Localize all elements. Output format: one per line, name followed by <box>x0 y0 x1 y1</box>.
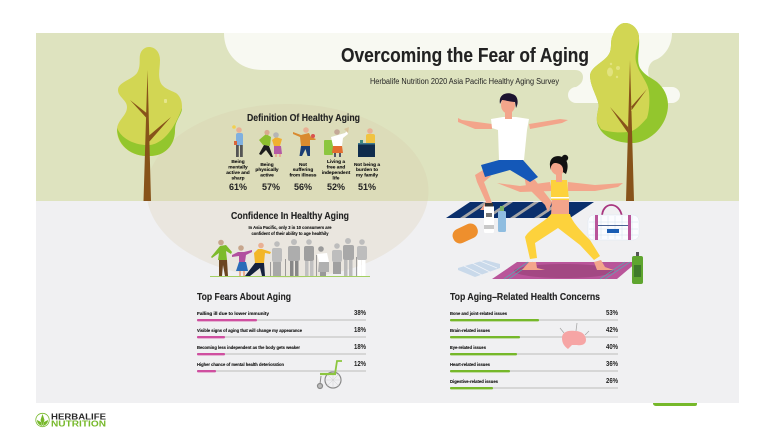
fear row 1: Falling ill due to lower immunity <box>197 311 269 317</box>
icon: wheelchair <box>318 361 342 388</box>
label: independent life: independent <box>322 170 351 176</box>
concern row 4 <box>450 361 619 372</box>
confidence text: In Asia Pacific, only 3 in 10 consumers are <box>248 225 332 231</box>
icon: independent traveller <box>324 127 349 157</box>
concern row 5: 26% <box>606 378 619 385</box>
panel: confidence in healthy aging <box>210 210 370 277</box>
label: mentally active: Being <box>231 159 245 165</box>
label: independent life: free and <box>327 164 345 170</box>
icon: mentally active person <box>232 125 243 157</box>
label: mentally active: active and <box>226 170 250 176</box>
fear row 2: Visible signs of aging that will change my appearance <box>197 328 302 334</box>
fear row 1: 38% <box>354 310 367 317</box>
percentages: 56% <box>294 182 312 192</box>
right tree <box>590 23 668 201</box>
green tab at bottom right <box>653 403 697 406</box>
icon: green bottle <box>632 252 643 284</box>
label: physically active: Being <box>260 162 274 168</box>
title: Overcoming the Fear of Aging <box>341 45 589 67</box>
blue striped yoga mat <box>446 202 594 218</box>
icon: folded towel <box>458 260 500 277</box>
concern row 4: 36% <box>606 361 619 368</box>
icon: white water bottle <box>484 203 494 233</box>
logo text: Herbalife: HERBALIFE <box>51 412 106 422</box>
label: not a burden: my family <box>356 172 378 178</box>
icon: brain <box>560 323 589 349</box>
heading: fears: Top Fears About Aging <box>197 291 291 303</box>
concern row 2: 42% <box>606 327 619 334</box>
icon: person free from illness <box>293 127 316 156</box>
fear row 3: 18% <box>354 344 367 351</box>
label: not a burden: burden to <box>356 167 378 173</box>
fear row 1 <box>197 310 367 321</box>
logo: Herbalife Nutrition <box>36 412 106 429</box>
icon: clear water bottle <box>498 206 506 232</box>
fear row 2: 18% <box>354 327 367 334</box>
heading: confidence: Confidence In Healthy Aging <box>231 210 349 222</box>
fear row 4: 12% <box>354 361 367 368</box>
concern row 5: Digestive-related issues <box>450 379 498 385</box>
concern row 1 <box>450 310 619 321</box>
icon: rolled orange towel <box>450 221 480 246</box>
background panel <box>36 33 739 403</box>
grey figures <box>270 238 367 276</box>
percentages: 57% <box>262 182 280 192</box>
panel: top aging-related health concerns <box>450 291 619 389</box>
label: physically active: physically <box>255 167 279 173</box>
pink yoga mat <box>492 262 637 279</box>
logo text: Nutrition: NUTRITION <box>51 420 106 429</box>
man in yoga pose <box>458 93 568 212</box>
concern row 5 <box>450 378 619 389</box>
concern row 3 <box>450 344 619 355</box>
percentages: 52% <box>327 182 345 192</box>
fear row 2 <box>197 327 367 338</box>
concern row 3: 40% <box>606 344 619 351</box>
fear row 4: Higher chance of mental health deterioration <box>197 362 284 368</box>
fear row 3: Becoming less independent as the body gets weaker <box>197 345 300 351</box>
woman in yoga pose <box>497 155 623 270</box>
heading: definition: Definition Of Healthy Aging <box>247 113 360 124</box>
percentages: 61% <box>229 182 247 192</box>
fear row 4 <box>197 361 367 372</box>
label: not suffering: Not <box>299 162 307 168</box>
icon: person at kitchen counter <box>358 128 375 157</box>
panel: definition of healthy aging <box>226 113 380 192</box>
panel: top fears about aging <box>197 291 367 388</box>
label: mentally active: mentally <box>228 164 248 170</box>
label: mentally active: sharp <box>231 176 245 182</box>
label: not a burden: Not being a <box>354 162 380 168</box>
heading: concerns: Top Aging–Related Health Concerns <box>450 291 600 303</box>
label: not suffering: from illness <box>290 172 317 178</box>
concern row 4: Heart-related issues <box>450 362 490 368</box>
colored figures <box>211 240 271 276</box>
label: independent life: Living a <box>327 159 345 165</box>
concern row 1: Bone and joint-related issues <box>450 311 507 317</box>
label: not suffering: suffering <box>293 167 313 173</box>
concern row 2 <box>450 327 619 338</box>
percentages <box>229 182 376 192</box>
cloud shape behind title <box>224 33 680 103</box>
icon: physically active couple <box>259 130 282 157</box>
percentages: 51% <box>358 182 376 192</box>
label: physically active: active <box>260 172 274 178</box>
fear row 3 <box>197 344 367 355</box>
concern row 3: Eye-related issues <box>450 345 486 351</box>
icon: leaf mark <box>36 413 49 427</box>
left tree <box>117 47 182 201</box>
backdrop ellipse <box>146 104 428 278</box>
ground line <box>210 276 370 277</box>
label: independent life: life <box>333 176 340 182</box>
concern row 2: Brain-related issues <box>450 328 490 334</box>
subtitle: Herbalife Nutrition 2020 Asia Pacific Healthy Aging Survey <box>370 77 559 86</box>
confidence text: confident of their ability to age healthily <box>252 231 329 237</box>
icon: sports bag <box>588 205 639 240</box>
concern row 1: 53% <box>606 310 619 317</box>
